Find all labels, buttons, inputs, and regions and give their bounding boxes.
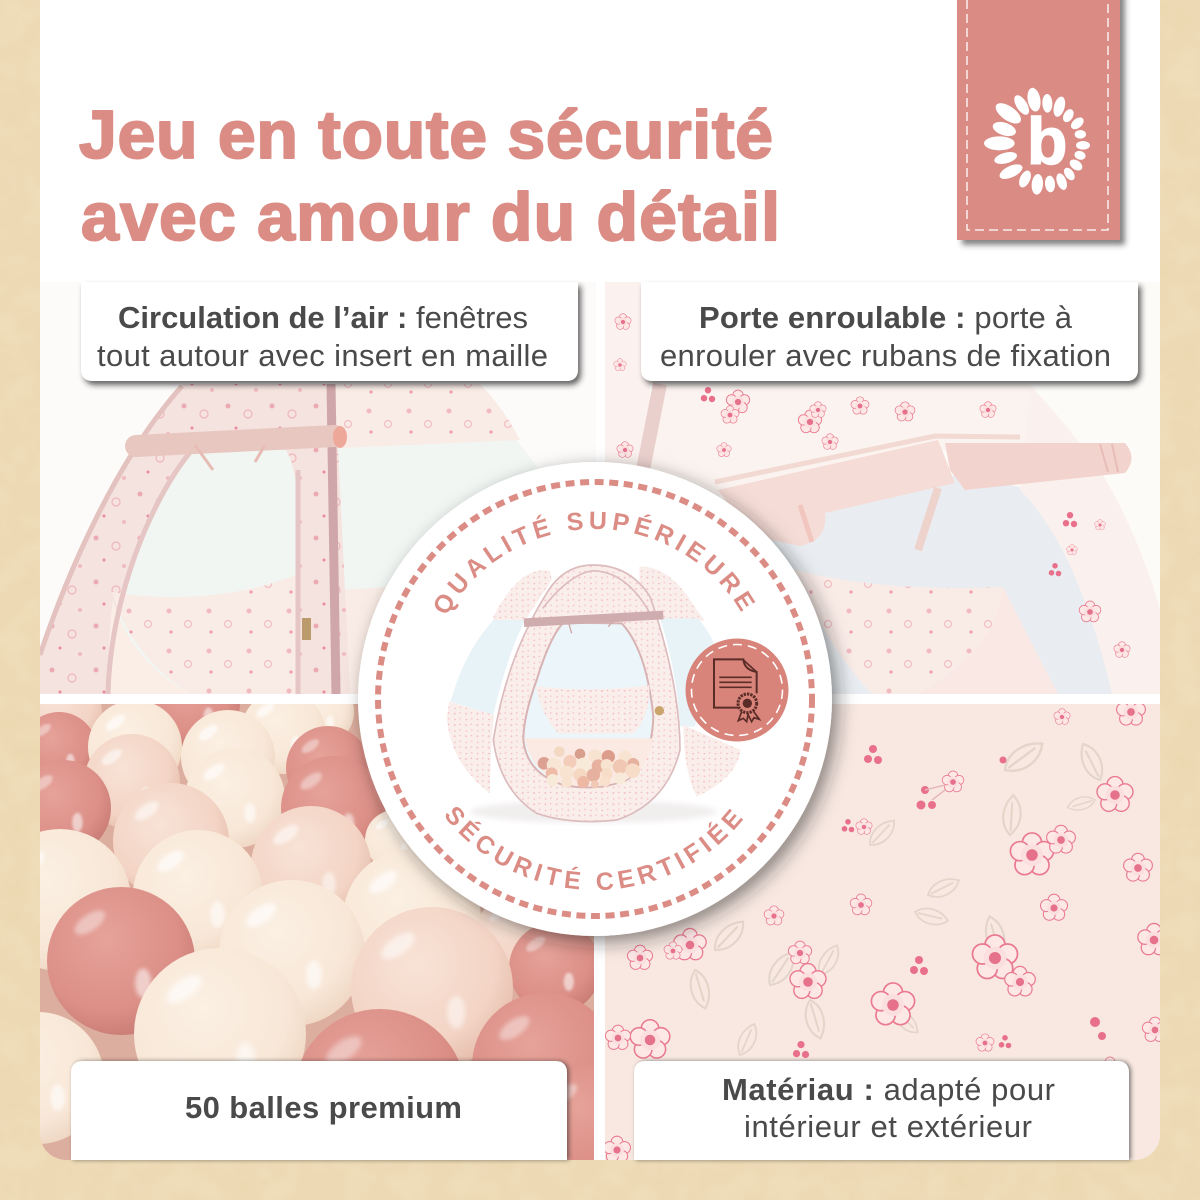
main title	[79, 97, 780, 255]
right window with mesh	[338, 440, 538, 590]
main title: avec amour du détail	[81, 179, 780, 255]
logo letter: b	[1027, 104, 1067, 178]
panel: air circulation tent photo	[40, 384, 538, 694]
door opening	[108, 450, 298, 694]
brand tag	[957, 0, 1120, 240]
top fabric	[652, 388, 1080, 490]
rolled door	[718, 440, 955, 546]
flowers	[604, 697, 1170, 1162]
seal text top: QUALITÉ SUPÉRIEURE	[434, 512, 756, 613]
tent fabric	[40, 384, 350, 694]
panel: roll-up door photo	[605, 282, 1160, 694]
upper right fabric	[330, 384, 520, 448]
round quality seal	[351, 455, 851, 955]
caption: material	[634, 1061, 1129, 1160]
balls	[40, 704, 594, 1160]
right fabric strip	[1020, 384, 1160, 694]
frame pole	[643, 384, 660, 470]
caption: material: intérieur et extérieur	[744, 1109, 1032, 1144]
roll ties	[195, 445, 265, 470]
panel: fabric pattern photo	[604, 697, 1170, 1162]
door opening	[771, 476, 1112, 694]
caption: roll-up door: enrouler avec rubans de fixation	[660, 338, 1111, 373]
caption: material: Matériau : adapté pour	[722, 1072, 1055, 1107]
tent product illustration	[447, 565, 741, 823]
caption: air circulation: Circulation de l’air : fenêtres	[118, 300, 528, 335]
caption: air circulation	[81, 282, 578, 381]
icon: brand flower logo	[984, 87, 1090, 195]
seam above roll	[715, 436, 1020, 482]
caption: air circulation: tout autour avec insert en maille	[97, 338, 548, 373]
caption: roll-up door	[641, 282, 1138, 381]
panel: balls photo	[40, 704, 594, 1160]
mini balls	[538, 746, 640, 788]
caption: roll-up door: Porte enroulable : porte à	[699, 300, 1073, 335]
printed flowers on fabric	[614, 314, 1130, 657]
cherries and dots	[793, 745, 1106, 1058]
pocket	[795, 570, 1003, 694]
icon: certificate badge	[686, 638, 788, 742]
leaves	[691, 740, 1104, 1057]
left fabric strip	[605, 282, 650, 462]
ties	[918, 488, 938, 550]
rolled door	[136, 436, 335, 446]
caption: balls: 50 balles premium	[185, 1090, 462, 1125]
dashed ring	[378, 482, 812, 916]
main title: Jeu en toute sécurité	[79, 97, 773, 173]
photo panels clipped to card	[0, 282, 1170, 1185]
seal text bottom: SÉCURITÉ CERTIFIÉE	[446, 807, 743, 890]
door pocket	[112, 574, 298, 694]
label tag	[302, 618, 311, 640]
door frame seam	[108, 450, 298, 694]
caption: balls	[71, 1061, 567, 1160]
tent pole	[331, 384, 336, 694]
